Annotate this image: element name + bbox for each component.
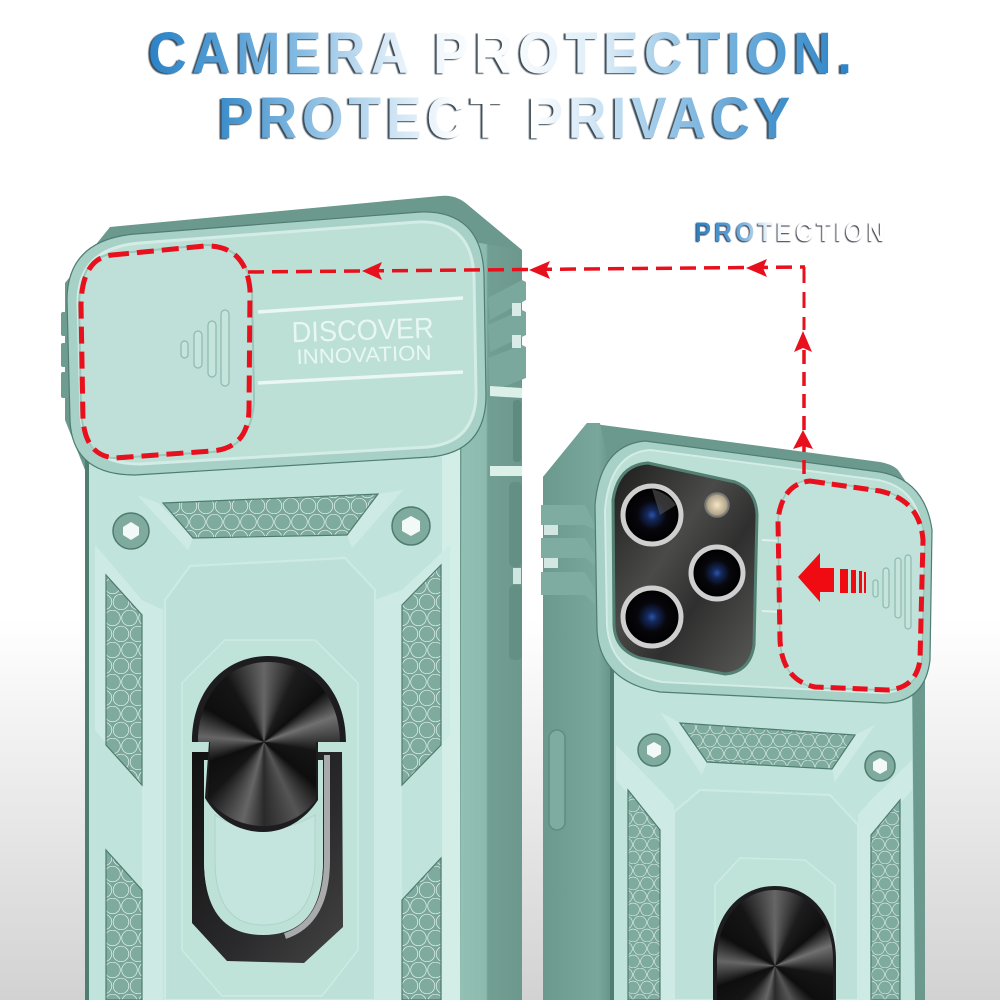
left phone case bbox=[61, 196, 526, 1000]
lens 1 bbox=[623, 486, 681, 544]
slider grip bbox=[181, 310, 229, 386]
red dashed slider outline bbox=[81, 246, 250, 458]
ring recess bbox=[715, 858, 835, 1000]
embossed text: DISCOVER bbox=[291, 313, 434, 349]
honeycomb meshes bbox=[106, 494, 441, 1000]
red slide arrow bbox=[798, 553, 866, 602]
case face bbox=[614, 640, 915, 1000]
face side band bbox=[442, 440, 460, 1000]
right phone case bbox=[541, 423, 932, 1000]
slider grip bbox=[873, 555, 911, 629]
side wall bbox=[543, 423, 612, 1000]
side wall right bbox=[460, 240, 522, 1000]
slider cover bbox=[79, 245, 254, 458]
camera island bbox=[613, 463, 757, 674]
honeycomb meshes bbox=[628, 723, 900, 1000]
lens 2 bbox=[691, 547, 743, 599]
arrowhead 4 bbox=[794, 331, 812, 352]
case body bbox=[543, 423, 925, 1000]
ring holder bbox=[713, 886, 836, 1000]
flash bbox=[705, 493, 729, 517]
title: PROTECT PRIVACY bbox=[218, 86, 790, 150]
embossed text: INNOVATION bbox=[296, 342, 432, 369]
light frame facets bbox=[616, 712, 912, 1000]
ring frame bbox=[192, 752, 343, 963]
text strip lines bbox=[258, 298, 463, 312]
arrowhead 5 bbox=[793, 430, 813, 449]
arrowhead 3 bbox=[746, 259, 767, 277]
disc: outer rim bbox=[192, 656, 346, 832]
central panel bbox=[674, 790, 858, 1000]
lens 3 bbox=[623, 588, 681, 646]
left ridges bbox=[61, 312, 69, 398]
frame junction bbox=[95, 790, 142, 880]
disc: brushed metal bbox=[198, 662, 340, 826]
camera module bbox=[595, 441, 932, 703]
side buttons right bbox=[490, 386, 522, 660]
protection path: dashed red line with arrows bbox=[248, 259, 813, 478]
title bbox=[148, 21, 852, 150]
case face bbox=[89, 430, 460, 1000]
ring highlight bbox=[285, 755, 327, 936]
arrowhead 2 bbox=[529, 261, 550, 279]
label: protection: PROTECTION bbox=[695, 218, 885, 247]
ring recess bbox=[182, 640, 358, 996]
screws bbox=[113, 507, 430, 549]
camera module bbox=[67, 212, 486, 475]
ring inner panel bbox=[204, 795, 323, 933]
title: CAMERA PROTECTION. bbox=[148, 21, 852, 85]
central panel bbox=[165, 558, 375, 1000]
arrowhead 1 bbox=[362, 262, 382, 280]
ring holder bbox=[192, 656, 346, 963]
screws bbox=[638, 734, 895, 781]
red dashed slider outline bbox=[778, 481, 923, 690]
side button bbox=[549, 730, 565, 830]
side ridges right bbox=[488, 280, 526, 392]
embossed text bbox=[291, 313, 435, 369]
slider cover bbox=[778, 480, 925, 690]
side ridges bbox=[541, 505, 595, 605]
track lines bbox=[762, 540, 782, 612]
case body bbox=[65, 196, 522, 1000]
light frame facets bbox=[95, 490, 450, 1000]
